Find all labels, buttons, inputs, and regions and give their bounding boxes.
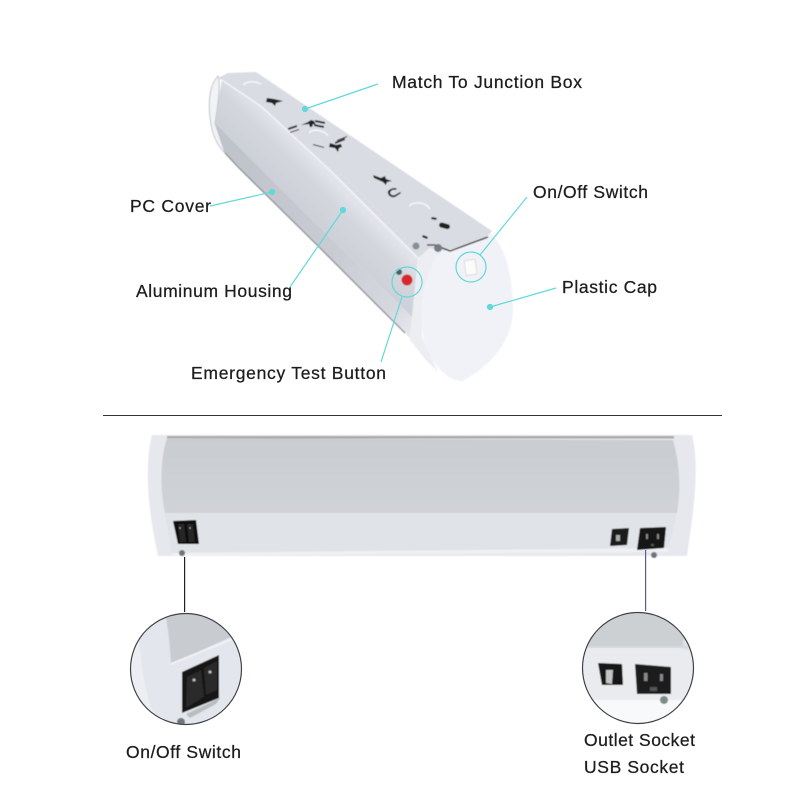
- label: PC Cover: PC Cover: [130, 196, 211, 216]
- indicator LED: [396, 269, 402, 275]
- label: On/Off Switch top: On/Off Switch: [533, 182, 648, 202]
- detail circle: on/off switch: [130, 612, 242, 726]
- screw left: [179, 550, 185, 556]
- top plate: [218, 72, 492, 258]
- left end of fixture: [209, 76, 225, 153]
- screw right: [651, 552, 657, 558]
- PC cover step band: [215, 123, 438, 370]
- callout: emergency button: [381, 267, 422, 362]
- label: Match To Junction Box: Match To Junction Box: [392, 72, 582, 92]
- detail circle: outlet and USB: [580, 610, 696, 726]
- label: Outlet Socket: Outlet Socket: [584, 730, 695, 750]
- callout: PC cover: [210, 190, 274, 206]
- end plate edge: [427, 237, 488, 251]
- underside shadow: [225, 153, 405, 333]
- label: On/Off Switch bottom: On/Off Switch: [126, 742, 241, 762]
- product photo: angled fixture: [209, 72, 513, 381]
- label: USB Socket: USB Socket: [584, 757, 684, 777]
- plate edge highlight: [222, 80, 418, 258]
- cap band: [410, 248, 445, 372]
- divider: [103, 415, 722, 416]
- plastic cap: [422, 233, 513, 381]
- emergency test button: [402, 274, 412, 286]
- label: Emergency Test Button: Emergency Test Button: [191, 363, 386, 383]
- on/off switch on cap: [464, 259, 477, 276]
- callout: aluminum housing: [290, 208, 346, 287]
- label: Plastic Cap: Plastic Cap: [562, 277, 657, 297]
- callout: junction box: [302, 84, 378, 112]
- USB socket: [610, 528, 629, 546]
- connector right: [645, 550, 646, 611]
- top plate holes and marks: [266, 98, 450, 239]
- bar body: [148, 435, 696, 556]
- callout: plastic cap: [488, 288, 556, 310]
- connector left: [184, 557, 185, 612]
- callout: switch: [456, 197, 527, 282]
- label: Aluminum Housing: Aluminum Housing: [136, 281, 292, 301]
- top edge: [167, 436, 674, 438]
- aluminum housing side: [215, 80, 418, 317]
- rocker switch: [173, 520, 199, 544]
- callout lines: [210, 84, 556, 362]
- screws: [412, 242, 420, 250]
- diffuser: [161, 438, 679, 513]
- product photo: front view bar: [148, 435, 696, 558]
- outlet socket: [637, 527, 666, 550]
- bottom panel: [165, 513, 677, 556]
